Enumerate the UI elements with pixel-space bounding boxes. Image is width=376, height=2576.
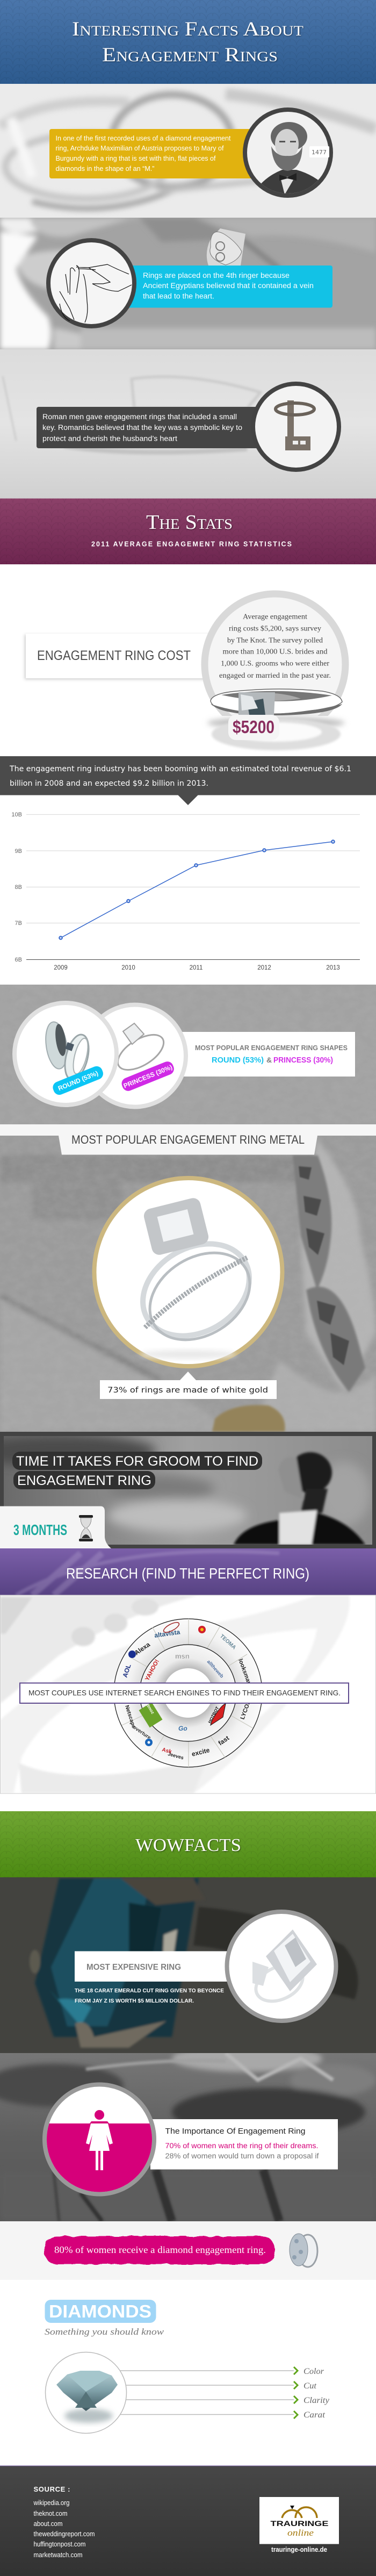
callout: dark text box: protect and cherish the husband’s heart bbox=[42, 434, 177, 443]
line chart: revenue by year: 2013 bbox=[326, 965, 340, 971]
heading text: The Stats bbox=[146, 511, 233, 534]
list: four Cs: Color bbox=[303, 2367, 324, 2376]
banner: metal heading bbox=[0, 1124, 376, 1154]
connector lines bbox=[120, 2371, 294, 2414]
callout: yellow text box bbox=[49, 129, 264, 178]
line chart: revenue by year bbox=[11, 812, 360, 971]
callout: pink ribbon: 80% of women receive a diamond engagement ring. bbox=[54, 2244, 266, 2255]
icon: portrait of Archduke Maximilian bbox=[245, 110, 331, 199]
callout: search engine statement: MOST COUPLES USE INTERNET SEARCH ENGINES TO FIND THEIR ENGAGEMENT RING. bbox=[28, 1689, 341, 1697]
list: four Cs: Clarity bbox=[303, 2396, 330, 2405]
panel: engagement ring cost bbox=[0, 564, 376, 756]
expensive ring text: FROM JAY Z IS WORTH $5 MILLION DOLLAR. bbox=[75, 1998, 194, 2004]
line chart: revenue by year: 2009 bbox=[54, 965, 68, 971]
footer bbox=[0, 2466, 376, 2576]
search engine names: alltheweb bbox=[206, 1659, 225, 1679]
logo: trauringe online: online bbox=[287, 2528, 314, 2538]
callout: yellow text box: ring, Archduke Maximilian of Austria proposes to Mary of bbox=[56, 144, 224, 152]
expensive ring text bbox=[75, 1987, 224, 2004]
shapes text box: MOST POPULAR ENGAGEMENT RING SHAPES bbox=[195, 1044, 348, 1052]
callout: blue text box: Ancient Egyptians believed that it contained a vein bbox=[143, 282, 314, 290]
callout: yellow text box: In one of the first recorded uses of a diamond engagement bbox=[56, 134, 231, 142]
cost description bubble: ring costs $5,200, says survey bbox=[229, 625, 321, 632]
line chart: revenue by year: 10B bbox=[11, 812, 22, 818]
heading text on dark pills: ENGAGEMENT RING bbox=[17, 1473, 151, 1488]
text box: importance facts: The Importance Of Engagement Ring bbox=[165, 2127, 305, 2136]
heading: wowfacts banner: WOWFACTS bbox=[135, 1835, 241, 1855]
sources list: theweddingreport.com bbox=[33, 2530, 95, 2538]
callout: dark text box: Roman men gave engagement rings that included a small bbox=[42, 413, 237, 421]
search engine names: AOL bbox=[121, 1663, 133, 1678]
expensive ring label: MOST EXPENSIVE RING bbox=[86, 1963, 181, 1972]
search engine names: altavista bbox=[154, 1628, 180, 1639]
sources list bbox=[33, 2485, 95, 2559]
line chart: revenue by year: 2010 bbox=[121, 965, 135, 971]
price tag: $5200 bbox=[233, 717, 274, 737]
search engine names: overture bbox=[132, 1724, 152, 1741]
cost label: ENGAGEMENT RING COST bbox=[37, 648, 191, 663]
search engine names: dmoz bbox=[145, 1703, 155, 1715]
panel: revenue statement: The engagement ring industry has been booming with an estimated total revenue of $6.1 bbox=[9, 765, 351, 773]
panel: diamond engagement ring share bbox=[0, 2221, 376, 2280]
callout: dark text box: key. Romantics believed that the key was a symbolic key to bbox=[42, 424, 242, 432]
callout: pink ribbon bbox=[45, 2236, 274, 2264]
heading: research banner bbox=[0, 1548, 376, 1595]
title bbox=[72, 18, 303, 66]
text box: importance facts bbox=[150, 2119, 338, 2169]
panel: fourth finger fact bbox=[0, 218, 376, 349]
line chart: revenue by year: 2012 bbox=[257, 965, 271, 971]
line chart: revenue by year: 7B bbox=[15, 920, 22, 927]
panel: most popular ring metal bbox=[0, 1124, 376, 1432]
search engine names: msn bbox=[175, 1652, 190, 1660]
subheading: Something you should know bbox=[45, 2327, 164, 2337]
title: Engagement Rings bbox=[102, 44, 278, 66]
search engine names: Jeeves bbox=[167, 1751, 184, 1761]
icon: small diamond ring bbox=[290, 2234, 317, 2267]
panel: most popular ring shapes bbox=[0, 985, 376, 1124]
logo: trauringe online bbox=[259, 2497, 339, 2544]
callout: blue text box bbox=[126, 266, 332, 307]
cost description bubble: by The Knot. The survey polled bbox=[227, 636, 323, 644]
text box: importance facts: 28% of women would turn down a proposal if bbox=[165, 2152, 319, 2160]
heading text on dark pills bbox=[12, 1452, 262, 1489]
cost description bubble: Average engagement bbox=[243, 613, 307, 620]
expensive ring text: THE 18 CARAT EMERALD CUT RING GIVEN TO BEYONCE bbox=[75, 1987, 224, 1994]
logo: trauringe online: TRAURINGE bbox=[271, 2519, 329, 2528]
cost description bubble bbox=[205, 594, 345, 735]
search engine names: Alexa bbox=[133, 1640, 151, 1656]
search engine names: Go bbox=[178, 1725, 187, 1732]
panel: time to find ring bbox=[0, 1432, 376, 1548]
callout: blue text box: Rings are placed on the 4th ringer because bbox=[143, 271, 290, 279]
search engine names: Ask bbox=[161, 1747, 172, 1755]
line chart: revenue by year: 2011 bbox=[190, 965, 203, 971]
callout: white gold share bbox=[100, 1372, 277, 1399]
princess label: PRINCESS (30%) bbox=[122, 1063, 173, 1090]
round label: ROUND (53%) bbox=[57, 1070, 99, 1092]
search engine names: Netscape bbox=[124, 1705, 136, 1730]
shapes text box: & bbox=[266, 1056, 272, 1064]
icon: hand drawing in circle bbox=[48, 240, 134, 326]
search engine names: excite bbox=[191, 1746, 211, 1758]
panel: search engine research bbox=[0, 1595, 376, 1793]
icon: woman pictogram chart bbox=[43, 2084, 156, 2199]
website url: trauringe-online.de bbox=[271, 2546, 327, 2553]
title: Interesting Facts About bbox=[72, 18, 303, 40]
line chart: revenue by year: 6B bbox=[15, 957, 22, 963]
icon: princess cut ring circle bbox=[84, 1005, 186, 1107]
icons: green chevrons bbox=[294, 2367, 298, 2419]
shapes text box: ROUND (53%) bbox=[212, 1056, 264, 1065]
sources list: about.com bbox=[33, 2520, 62, 2528]
groom figure bbox=[234, 1452, 365, 1545]
callout: search engine statement bbox=[20, 1683, 349, 1703]
callout: white gold share: 73% of rings are made of white gold bbox=[107, 1386, 268, 1395]
expensive ring label bbox=[75, 1951, 230, 1982]
icon: roman key ring bbox=[253, 384, 339, 470]
icon: diamond in circle bbox=[45, 2352, 127, 2434]
search engine wheel bbox=[114, 1619, 262, 1767]
icon: emerald cut ring bbox=[227, 1912, 336, 2021]
icon: round band rings circle bbox=[15, 1003, 117, 1105]
list: four Cs: Cut bbox=[303, 2381, 317, 2391]
line chart: revenue by year: 9B bbox=[15, 848, 22, 855]
panel: revenue statement bbox=[0, 756, 376, 805]
date tag: 1477 bbox=[312, 149, 327, 156]
heading: wowfacts banner bbox=[0, 1811, 376, 1877]
price tag bbox=[228, 715, 279, 740]
search engine names: fast bbox=[217, 1734, 230, 1747]
search engine names: TEOMA bbox=[219, 1633, 237, 1651]
list: four Cs: Carat bbox=[303, 2410, 326, 2420]
cost description bubble: 1,000 U.S. grooms who were either bbox=[221, 659, 330, 668]
stat: 3 months: 3 MONTHS bbox=[13, 1522, 67, 1538]
callout: blue text box: that lead to the heart. bbox=[143, 292, 214, 300]
callout: dark text box bbox=[37, 407, 262, 448]
sources list: wikipedia.org bbox=[33, 2499, 70, 2507]
date tag bbox=[309, 146, 329, 157]
callout: yellow text box: diamonds in the shape of an “M.” bbox=[56, 164, 155, 173]
heading text on dark pills: TIME IT TAKES FOR GROOM TO FIND bbox=[16, 1454, 258, 1469]
icon: hourglass bbox=[79, 1515, 93, 1541]
stat: 3 months bbox=[0, 1506, 111, 1548]
panel: most expensive ring bbox=[0, 1877, 376, 2053]
cost description bubble: more than 10,000 U.S. brides and bbox=[222, 647, 328, 656]
icon: solitaire ring with reflection bbox=[207, 689, 352, 752]
text box: importance facts: 70% of women want the ring of their dreams. bbox=[165, 2142, 318, 2150]
header: title banner bbox=[0, 0, 376, 84]
sources list: huffingtonpost.com bbox=[33, 2541, 86, 2548]
panel: first diamond ring fact bbox=[0, 84, 376, 218]
sources list: marketwatch.com bbox=[33, 2551, 83, 2559]
subheading text: 2011 AVERAGE ENGAGEMENT RING STATISTICS bbox=[91, 541, 292, 548]
banner: metal heading: MOST POPULAR ENGAGEMENT RING METAL bbox=[71, 1133, 305, 1146]
sources list: SOURCE : bbox=[33, 2485, 70, 2493]
icon: heart ring on finger bbox=[207, 228, 245, 266]
cost description bubble: engaged or married in the past year. bbox=[219, 671, 331, 679]
shapes text box bbox=[177, 1032, 355, 1077]
panel: roman key ring fact bbox=[0, 349, 376, 499]
panel: diamonds 4 Cs bbox=[0, 2280, 376, 2466]
panel: revenue statement: billion in 2008 and an expected $9.2 billion in 2013. bbox=[10, 779, 208, 788]
callout: yellow text box: Burgundy with a ring that is set with thin, flat pieces of bbox=[56, 154, 216, 162]
round label bbox=[51, 1065, 105, 1096]
search engine names bbox=[121, 1620, 253, 1761]
search engine names: LYCOS bbox=[240, 1699, 252, 1720]
search engine names: HOTBOT bbox=[207, 1706, 220, 1724]
list: four Cs bbox=[303, 2367, 330, 2420]
search engine names: YAHOO! bbox=[144, 1659, 161, 1682]
cost label bbox=[26, 634, 211, 678]
heading: research banner: RESEARCH (FIND THE PERFECT RING) bbox=[66, 1565, 309, 1582]
panel: the importance of engagement ring bbox=[0, 2045, 376, 2221]
heading: diamonds: DIAMONDS bbox=[49, 2301, 151, 2321]
line chart: revenue by year: 8B bbox=[15, 884, 22, 891]
shapes text box: PRINCESS (30%) bbox=[273, 1056, 333, 1065]
sources list: theknot.com bbox=[33, 2510, 68, 2517]
search engine names: looksmart bbox=[237, 1658, 253, 1687]
icon: white gold ring in gold circle bbox=[95, 1178, 283, 1366]
heading: the stats banner bbox=[0, 499, 376, 564]
